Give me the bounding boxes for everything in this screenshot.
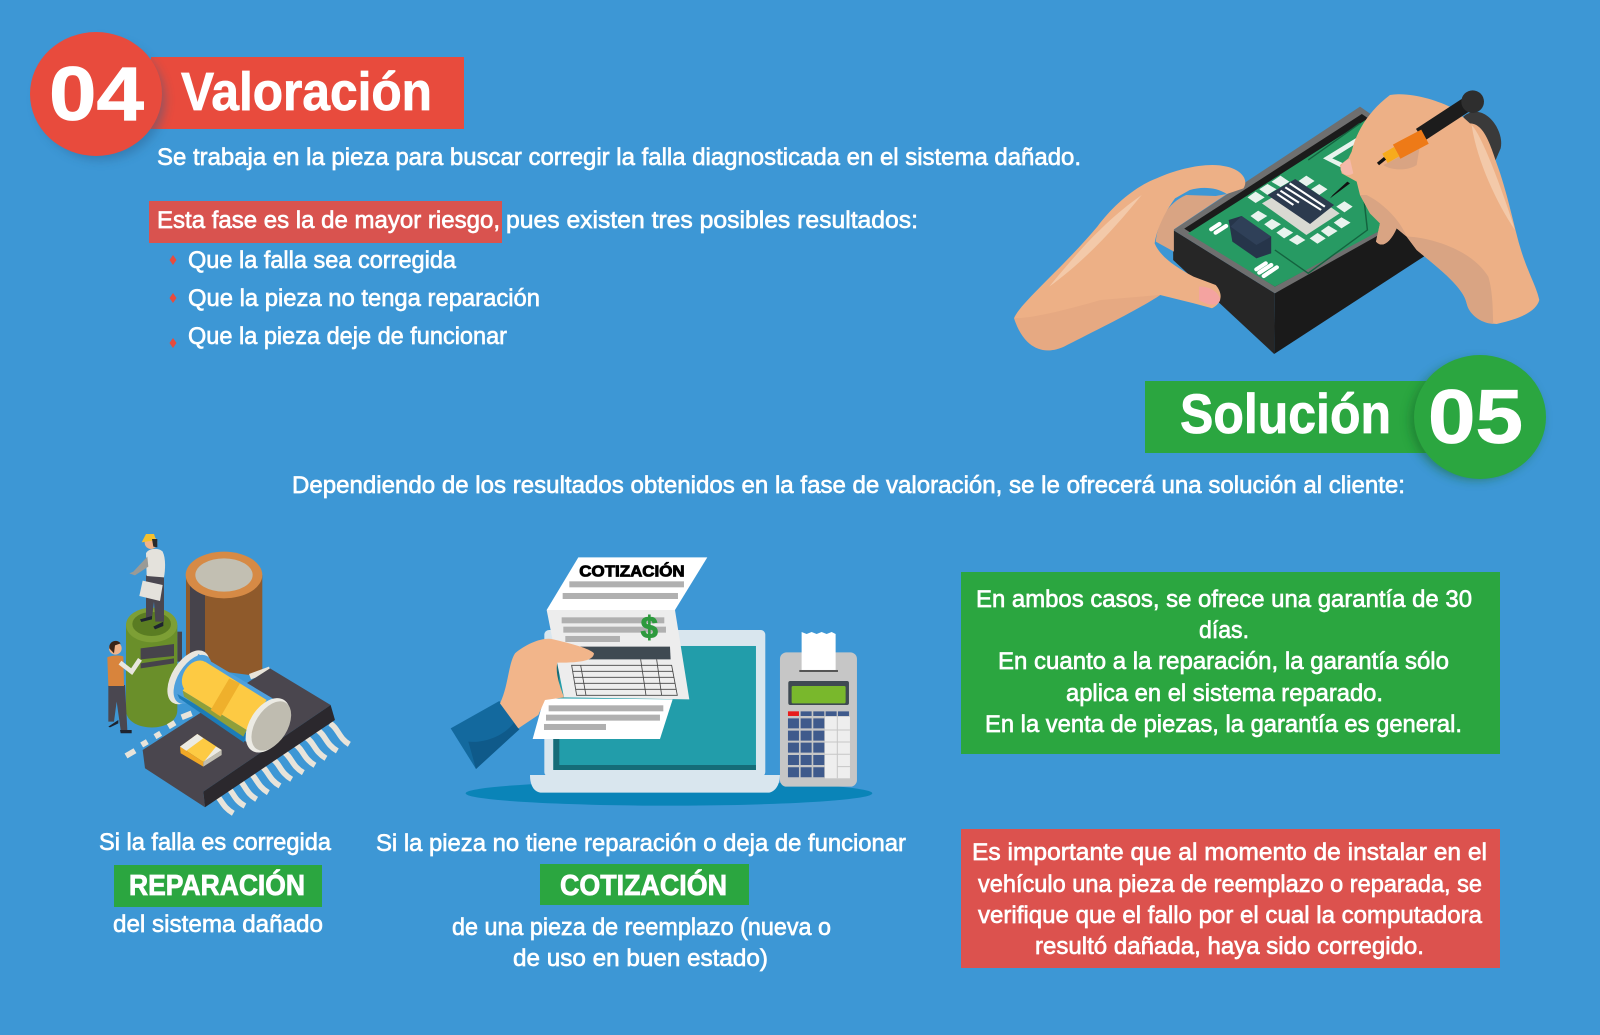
highlight sentence xyxy=(149,201,918,243)
caption: cotización: COTIZACIÓN xyxy=(560,868,727,902)
panel: aviso importante: Es importante que al momento de instalar en el xyxy=(972,839,1487,866)
caption: reparación xyxy=(99,829,332,938)
text: intro valoración: Se trabaja en la pieza para buscar corregir la falla diagnosticada en el sistema dañado. xyxy=(157,144,1081,171)
heading: 04 Valoración: 04 xyxy=(49,52,144,137)
right hand with pen xyxy=(1330,90,1539,324)
illustration: hands repairing circuit board xyxy=(1014,90,1539,354)
brown capacitor xyxy=(186,552,262,677)
caption: reparación: REPARACIÓN xyxy=(129,868,305,902)
panel: aviso importante xyxy=(961,829,1500,968)
yellow diode xyxy=(159,643,299,760)
quote document: COTIZACIÓN xyxy=(579,563,685,581)
payment terminal xyxy=(780,632,857,787)
heading: 04 Valoración: Valoración xyxy=(181,62,432,122)
bullet list xyxy=(170,247,540,350)
panel: aviso importante: resultó dañada, haya sido corregido. xyxy=(1035,933,1424,960)
left hand xyxy=(1014,165,1245,350)
panel: garantía: En cuanto a la reparación, la garantía sólo xyxy=(998,648,1449,675)
panel: garantía: En la venta de piezas, la garantía es general. xyxy=(985,711,1462,738)
box and board xyxy=(1173,107,1471,354)
heading: 04 Valoración xyxy=(30,32,464,160)
quote document xyxy=(533,557,707,739)
shadow xyxy=(466,781,872,806)
green capacitor xyxy=(126,608,182,727)
caption: cotización xyxy=(376,830,906,972)
panel: garantía xyxy=(961,572,1500,754)
panel: aviso importante: vehículo una pieza de reemplazo o reparada, se xyxy=(978,871,1482,898)
text: intro solución: Dependiendo de los resultados obtenidos en la fase de valoración, se le ofrecerá una solución al cliente: xyxy=(292,472,1405,499)
highlight sentence: Esta fase es la de mayor riesgo, xyxy=(157,207,500,234)
quote document: $ xyxy=(641,610,658,644)
caption: cotización: Si la pieza no tiene reparación o deja de funcionar xyxy=(376,830,906,857)
caption: cotización: de una pieza de reemplazo (nueva o xyxy=(452,914,831,941)
panel: garantía: En ambos casos, se ofrece una garantía de 30 xyxy=(976,586,1472,613)
black chip xyxy=(126,668,349,813)
worker standing xyxy=(129,534,165,629)
heading: Solución 05: Solución xyxy=(1180,382,1391,445)
caption: cotización: de uso en buen estado) xyxy=(513,945,768,972)
illustration: electronic components and workers xyxy=(107,534,349,813)
bullet list: Que la pieza deje de funcionar xyxy=(188,323,507,350)
panel: garantía: aplica en el sistema reparado. xyxy=(1066,680,1383,707)
illustration: quote document, laptop and register xyxy=(451,557,872,806)
sleeve xyxy=(451,701,519,769)
heading: Solución 05 xyxy=(1145,355,1546,480)
panel: aviso importante: verifique que el fallo por el cual la computadora xyxy=(978,902,1483,929)
panel: garantía: días. xyxy=(1199,617,1249,644)
caption: reparación: Si la falla es corregida xyxy=(99,829,332,856)
small component xyxy=(180,734,222,767)
worker with vest xyxy=(107,641,140,733)
caption: reparación: del sistema dañado xyxy=(113,911,323,938)
laptop xyxy=(530,630,780,793)
heading: Solución 05: 05 xyxy=(1428,375,1523,460)
bullet list: Que la falla sea corregida xyxy=(188,247,457,274)
hand holding document xyxy=(500,639,594,728)
bullet list: Que la pieza no tenga reparación xyxy=(188,285,540,312)
highlight sentence: pues existen tres posibles resultados: xyxy=(506,207,918,234)
